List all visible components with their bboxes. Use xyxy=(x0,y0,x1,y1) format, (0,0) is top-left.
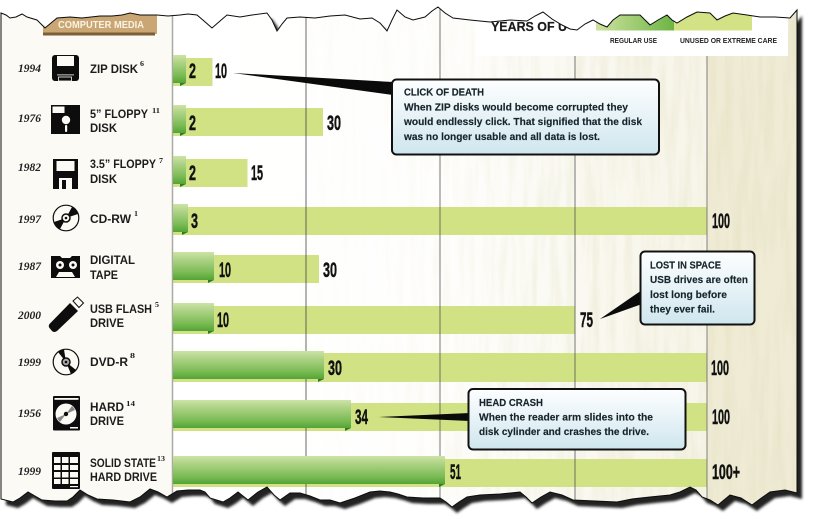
regular-use bars xyxy=(173,55,445,487)
bar values: 51 xyxy=(450,461,461,484)
media names: 7 xyxy=(159,156,163,165)
callout: click of death: would endlessly click. That signified that the disk xyxy=(403,116,642,128)
years: 1999 xyxy=(18,464,41,478)
bar values: 30 xyxy=(327,112,341,135)
bar values: 100 xyxy=(712,406,730,429)
header panel xyxy=(483,12,788,56)
callout: head crash xyxy=(378,389,686,450)
bar values: 15 xyxy=(251,162,263,185)
media names: ZIP DISK xyxy=(90,62,138,76)
legend: regular use: REGULAR USE xyxy=(610,36,657,45)
years: 1997 xyxy=(18,212,42,226)
bar values: 30 xyxy=(323,259,337,282)
icon: DVD-R xyxy=(53,349,79,375)
callout: lost in space xyxy=(600,252,754,324)
unused-life bars xyxy=(173,58,707,487)
icon: CD-RW xyxy=(53,205,79,231)
media names: 3.5” FLOPPY xyxy=(90,157,156,171)
icon: digital tape xyxy=(51,256,80,278)
media names: DRIVE xyxy=(90,414,124,428)
years: 1987 xyxy=(18,259,42,273)
bar values: 100+ xyxy=(712,461,740,484)
callout: click of death: When ZIP disks would become corrupted they xyxy=(404,102,628,114)
media names: 14 xyxy=(126,399,135,408)
bar values xyxy=(189,60,740,484)
bar values: 2 xyxy=(189,162,196,185)
icon: 5 inch floppy xyxy=(51,105,80,134)
media names: DIGITAL xyxy=(90,253,135,267)
media names: 11 xyxy=(152,106,160,115)
media names: SOLID STATE xyxy=(90,456,156,470)
years xyxy=(17,61,42,478)
legend: unused or extreme care: UNUSED OR EXTREME CARE xyxy=(680,36,777,45)
years: 2000 xyxy=(17,308,41,322)
years: 1999 xyxy=(18,355,41,369)
bar values: 3 xyxy=(191,210,198,233)
bar values: 10 xyxy=(217,309,229,332)
bar values: 30 xyxy=(328,357,342,380)
media names: 5” FLOPPY xyxy=(90,107,148,121)
media names: DVD-R xyxy=(90,355,128,369)
bar values: 2 xyxy=(189,60,196,83)
media names: HARD DRIVE xyxy=(90,470,157,484)
grid lines xyxy=(172,0,707,510)
callout: click of death: CLICK OF DEATH xyxy=(404,86,484,98)
callout: click of death xyxy=(233,73,659,154)
left label column xyxy=(0,0,172,510)
media names: CD-RW xyxy=(90,212,132,226)
media names xyxy=(90,59,165,484)
icon: hard drive xyxy=(53,396,80,430)
callout: head crash: When the reader arm slides into the xyxy=(479,412,653,424)
arrow: pointer to hard drive value xyxy=(378,413,470,421)
bar values: 100 xyxy=(711,357,729,380)
column banner xyxy=(43,14,157,36)
media names: DISK xyxy=(90,172,117,186)
media names: 5 xyxy=(155,300,159,309)
bar values: 34 xyxy=(355,406,368,429)
callout: lost in space: lost long before xyxy=(650,289,727,301)
bar values: 10 xyxy=(215,60,227,83)
media names: 1 xyxy=(134,209,138,218)
years: 1982 xyxy=(18,160,41,174)
chart title: YEARS OF U xyxy=(491,19,567,34)
arrow: pointer to ZIP disk xyxy=(233,73,393,95)
bar values: 2 xyxy=(189,112,196,135)
arrow: pointer to USB value xyxy=(600,292,640,319)
media names: USB FLASH xyxy=(90,302,152,316)
icon: 3.5 inch floppy xyxy=(53,159,78,189)
years: 1956 xyxy=(18,406,41,420)
callout: head crash: disk cylinder and crashes the drive. xyxy=(479,426,649,438)
callout: head crash: HEAD CRASH xyxy=(479,397,543,409)
icon: USB flash drive xyxy=(49,297,84,332)
media names: 13 xyxy=(157,454,165,463)
callout: lost in space: USB drives are often xyxy=(650,274,748,286)
column banner: COMPUTER MEDIA xyxy=(58,20,144,31)
media names: HARD xyxy=(90,400,124,414)
bar values: 100 xyxy=(712,210,730,233)
chart background xyxy=(400,12,796,504)
media names: 6 xyxy=(140,59,144,68)
media names: TAPE xyxy=(90,268,118,282)
media names: DRIVE xyxy=(90,316,124,330)
callout: click of death: was no longer usable and all data is lost. xyxy=(403,131,600,143)
legend: regular use xyxy=(596,16,674,43)
years: 1976 xyxy=(18,111,41,125)
legend: unused or extreme care xyxy=(674,12,777,43)
icon: zip disk xyxy=(52,55,79,81)
callout: lost in space: LOST IN SPACE xyxy=(650,260,721,272)
icon: solid state drive xyxy=(52,452,80,489)
bar values: 10 xyxy=(219,259,231,282)
media names: 8 xyxy=(130,351,135,360)
media names: DISK xyxy=(90,121,117,135)
callout: lost in space: they ever fail. xyxy=(650,304,715,316)
bar values: 75 xyxy=(580,309,593,332)
years: 1994 xyxy=(18,61,41,75)
